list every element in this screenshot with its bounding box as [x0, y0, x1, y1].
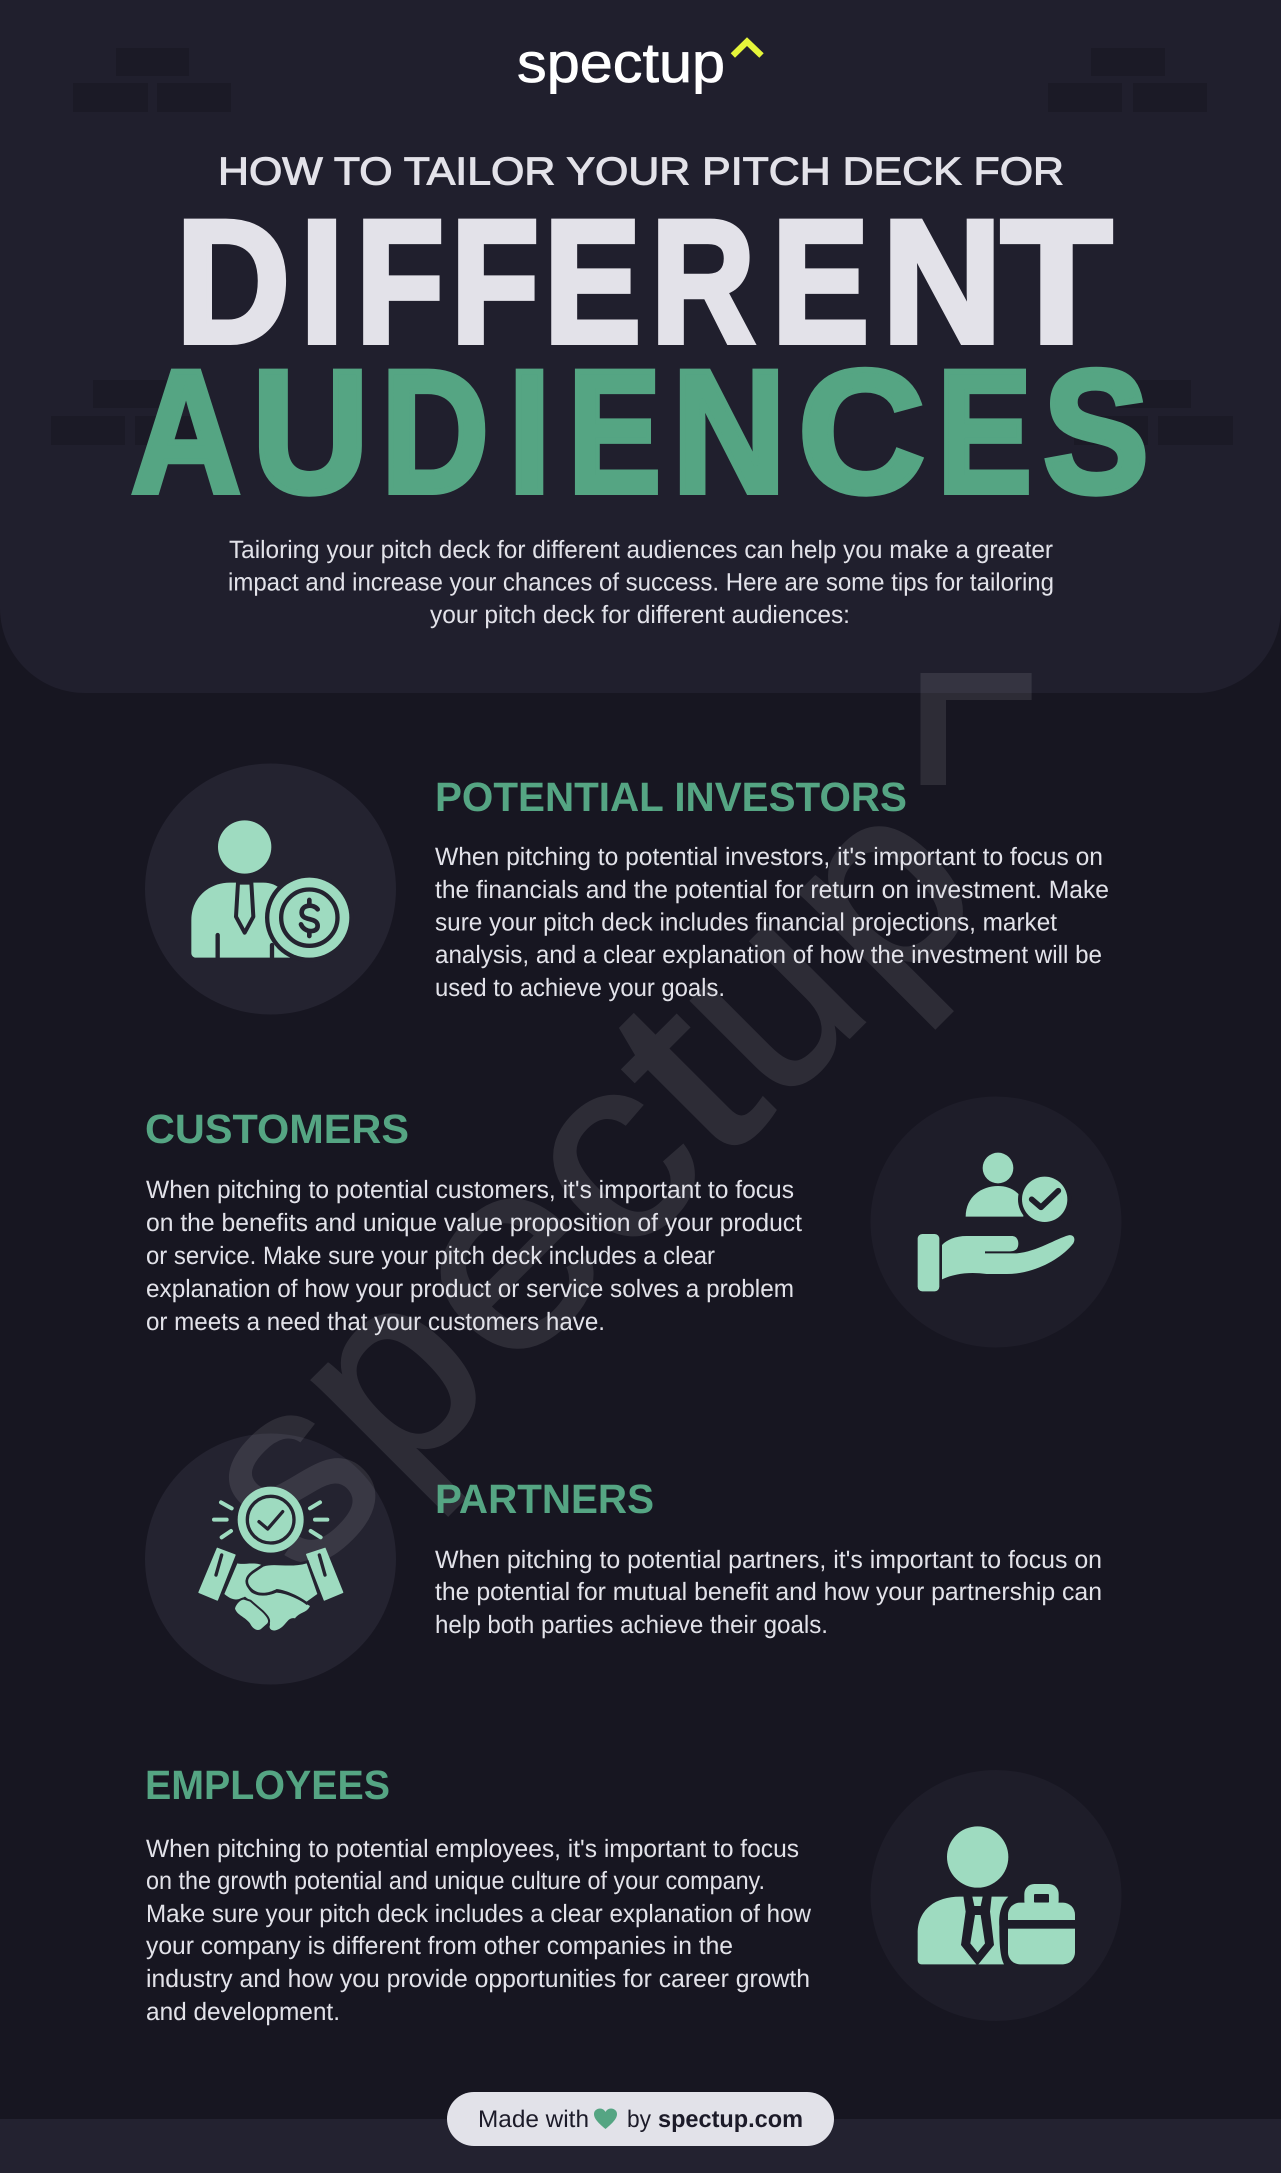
- body text: explanation of how your product or service solves a problem: [146, 1275, 794, 1303]
- body text: your company is different from other companies in the: [146, 1932, 733, 1960]
- icon: hand with customer: [918, 1153, 1074, 1291]
- intro text: [228, 536, 1054, 629]
- panel circle: employees: [870, 1770, 1122, 2021]
- watermark: spectup: [139, 673, 1032, 1623]
- body text: When pitching to potential partners, it's important to focus on: [435, 1546, 1102, 1574]
- section: employees: [145, 1762, 812, 2026]
- title line 2: I: [300, 185, 344, 380]
- footer badge: [447, 2092, 834, 2146]
- title line 3: N: [672, 335, 786, 530]
- footer badge: by: [627, 2106, 651, 2133]
- heading: CUSTOMERS: [145, 1106, 409, 1152]
- body text: on the benefits and unique value proposition of your product: [146, 1209, 802, 1237]
- icon: logo caret: [731, 37, 764, 58]
- title line 3: I: [508, 335, 551, 530]
- watermark: spectup: t: [552, 943, 817, 1209]
- body text: used to achieve your goals.: [435, 974, 725, 1002]
- body text: on the growth potential and unique culture of your company.: [146, 1867, 765, 1895]
- title line 2: R: [651, 185, 755, 380]
- intro text: your pitch deck for different audiences:: [430, 601, 850, 629]
- title line 3: E: [568, 335, 661, 530]
- footer badge: Made with: [478, 2106, 589, 2133]
- panel circle: investors: [145, 764, 396, 1014]
- title line 3: S: [1043, 335, 1149, 530]
- section: partners: [435, 1476, 1102, 1639]
- watermark: spectup: c: [456, 1004, 757, 1305]
- watermark: spectup: p: [232, 1220, 542, 1529]
- title line 3: U: [252, 335, 369, 530]
- body text: analysis, and a clear explanation of how the investment will be: [435, 941, 1102, 969]
- title line 2: T: [1001, 185, 1112, 380]
- body text: or meets a need that your customers have.: [146, 1308, 605, 1336]
- watermark: spectup: u: [612, 845, 916, 1149]
- body text: When pitching to potential customers, it's important to focus: [146, 1176, 794, 1204]
- title line 1: HOW TO TAILOR YOUR PITCH DECK FOR: [218, 150, 1064, 194]
- body text: industry and how you provide opportunities for career growth: [146, 1965, 810, 1993]
- intro text: impact and increase your chances of success. Here are some tips for tailoring: [228, 568, 1054, 596]
- body text: the potential for mutual benefit and how your partnership can: [435, 1578, 1102, 1606]
- title line 2: D: [176, 185, 290, 380]
- title line 3: D: [381, 335, 489, 530]
- body text: sure your pitch deck includes financial projections, market: [435, 908, 1057, 936]
- heading: POTENTIAL INVESTORS: [435, 774, 907, 820]
- body text: [146, 1835, 812, 2026]
- heading: PARTNERS: [435, 1476, 654, 1522]
- section: potential investors: [435, 774, 1109, 1002]
- body text: and development.: [146, 1998, 340, 2026]
- title line 2: F: [451, 185, 539, 380]
- title line 2: E: [544, 185, 641, 380]
- body text: When pitching to potential investors, it's important to focus on: [435, 843, 1103, 871]
- watermark: spectup: p: [719, 733, 1029, 1042]
- header panel: [0, 0, 1281, 693]
- footer band: [0, 2119, 1281, 2173]
- body text: the financials and the potential for return on investment. Make: [435, 876, 1109, 904]
- icon: investor with coin: [191, 820, 354, 962]
- logo: spectup: [517, 31, 725, 94]
- section: customers: [145, 1106, 802, 1336]
- title line 3: C: [798, 335, 925, 530]
- body text: help both parties achieve their goals.: [435, 1611, 828, 1639]
- watermark: spectup: e: [342, 1100, 661, 1419]
- panel circle: customers: [870, 1096, 1122, 1348]
- icon: employee with briefcase: [918, 1826, 1075, 1966]
- title line 2: E: [772, 185, 869, 380]
- body text: Make sure your pitch deck includes a clear explanation of how: [146, 1900, 812, 1928]
- title line 2: N: [882, 185, 1002, 380]
- icon: heart: [594, 2108, 617, 2129]
- title line 3: A: [131, 335, 241, 530]
- body text: or service. Make sure your pitch deck includes a clear: [146, 1242, 715, 1270]
- watermark: spectup: s: [139, 1325, 436, 1622]
- intro text: Tailoring your pitch deck for different audiences can help you make a greater: [229, 536, 1053, 564]
- icon: handshake with badge: [199, 1487, 343, 1630]
- title line 2: F: [356, 185, 444, 380]
- body text: When pitching to potential employees, it's important to focus: [146, 1835, 799, 1863]
- heading: EMPLOYEES: [145, 1762, 390, 1808]
- body text: [146, 1176, 802, 1336]
- body text: [435, 843, 1109, 1002]
- body text: [435, 1546, 1102, 1639]
- title line 3: E: [937, 335, 1032, 530]
- panel circle: partners: [145, 1434, 396, 1684]
- footer badge: spectup.com: [658, 2106, 803, 2133]
